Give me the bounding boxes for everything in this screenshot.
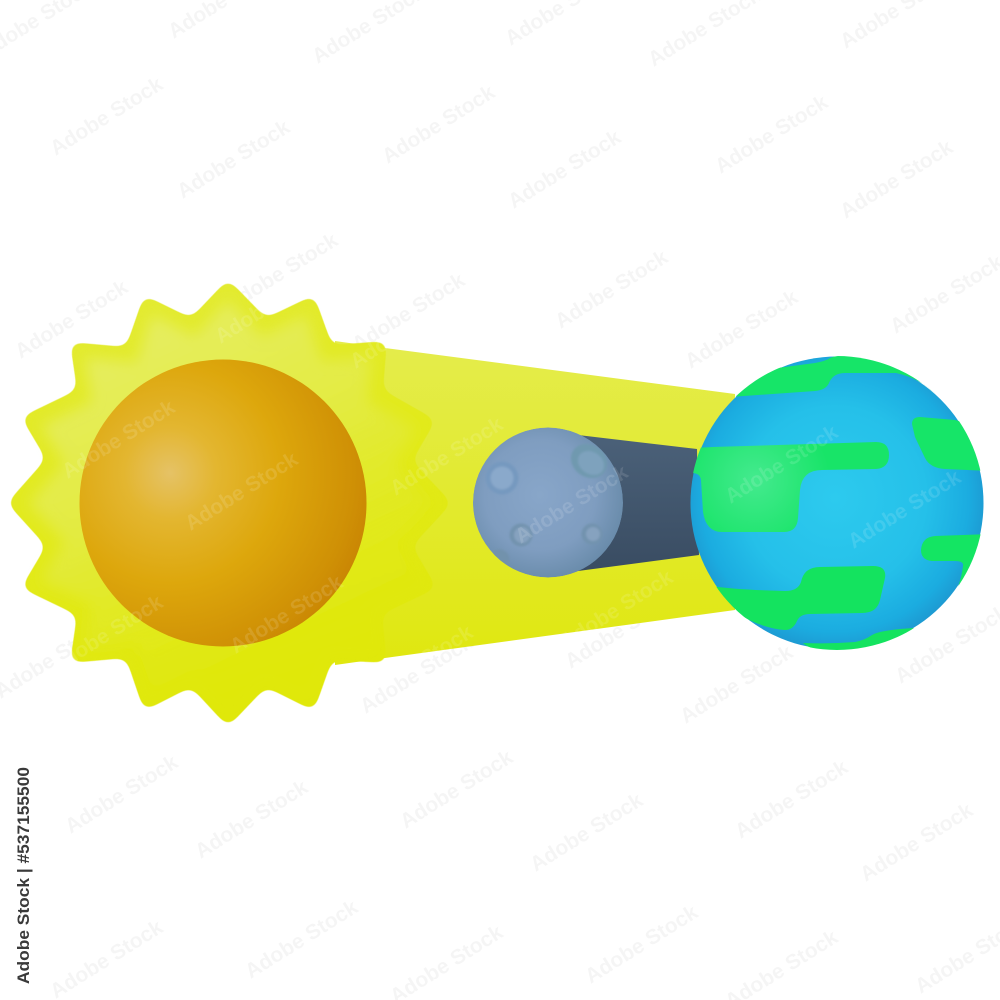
watermark: Adobe Stock repeated on background: Adobe Stock [11, 276, 132, 363]
watermark: Adobe Stock repeated on background: Adobe Stock [504, 126, 625, 213]
watermark: Adobe Stock repeated on background: Adobe Stock [173, 116, 294, 203]
watermark: Adobe Stock repeated on background: Adobe Stock [681, 286, 802, 373]
continent: bottom strip [803, 628, 914, 650]
watermark: Adobe Stock repeated on background: Adobe Stock [396, 746, 517, 833]
watermark: Adobe Stock repeated on background: Adobe Stock [526, 789, 647, 876]
watermark: Adobe Stock over artwork: Adobe Stock [46, 591, 167, 678]
watermark: Adobe Stock over artwork: Adobe Stock [346, 286, 467, 373]
watermark: Adobe Stock repeated on background: Adobe Stock [581, 901, 702, 988]
watermark: Adobe Stock repeated on background: Adobe Stock [61, 751, 182, 838]
watermark: Adobe Stock repeated on background: Adobe Stock [731, 756, 852, 843]
watermark: Adobe Stock repeated on background: Adobe Stock [676, 641, 797, 728]
continent: upper right [912, 417, 980, 471]
watermark: Adobe Stock repeated on background: Adobe Stock [46, 73, 167, 160]
watermark: Adobe Stock repeated on background: Adobe Stock [856, 799, 977, 886]
stock id caption: Adobe Stock | #537155500 [14, 767, 33, 984]
watermark: Adobe Stock over artwork: Adobe Stock [356, 621, 477, 708]
sun [7, 279, 452, 727]
sun rays [7, 279, 452, 727]
continents [692, 356, 990, 650]
watermark: Adobe Stock over artwork [46, 261, 965, 708]
watermark: Adobe Stock over artwork: Adobe Stock [226, 571, 347, 658]
crater: lower left [510, 524, 532, 546]
crater: bottom edge [492, 550, 508, 565]
earth [690, 356, 990, 650]
watermark: Adobe Stock repeated on background: Adobe Stock [356, 631, 477, 718]
continent: middle right [921, 534, 981, 586]
watermark: Adobe Stock over artwork: Adobe Stock [556, 566, 677, 653]
continent: bottom [710, 566, 885, 630]
crater: top right [571, 446, 604, 478]
moon shadow [578, 435, 699, 571]
moon body [473, 428, 623, 578]
watermark: Adobe Stock repeated on background: Adobe Stock [378, 81, 499, 168]
watermark: Adobe Stock repeated on background: Adobe Stock [241, 896, 362, 983]
watermark: Adobe Stock over artwork: Adobe Stock [386, 413, 507, 500]
watermark: Adobe Stock repeated on background: Adobe Stock [551, 246, 672, 333]
moon [473, 428, 623, 578]
watermark: Adobe Stock over artwork: Adobe Stock [181, 448, 302, 535]
crater: left ring [487, 462, 518, 494]
watermark: Adobe Stock repeated on background: Adobe Stock [561, 586, 682, 673]
watermark: Adobe Stock over artwork: Adobe Stock [844, 466, 965, 553]
watermark: Adobe Stock repeated on background: Adobe Stock [221, 229, 342, 316]
sun rays highlight [29, 301, 430, 705]
watermark: Adobe Stock repeated on background: Adobe Stock [348, 269, 469, 356]
watermark: Adobe Stock over artwork: Adobe Stock [511, 461, 632, 548]
watermark: Adobe Stock repeated on background: Adobe Stock [191, 776, 312, 863]
sun disc [80, 360, 366, 646]
watermark: Adobe Stock over artwork: Adobe Stock [211, 261, 332, 348]
watermark: Adobe Stock repeated on background: Adobe Stock [836, 136, 957, 223]
watermark: Adobe Stock over artwork: Adobe Stock [721, 421, 842, 508]
watermark: Adobe Stock repeated on background: Adobe Stock [711, 91, 832, 178]
watermark: Adobe Stock over artwork: Adobe Stock [58, 396, 179, 483]
crater: lower right [582, 524, 600, 542]
continent: center [692, 442, 889, 532]
sunlight beam [335, 341, 735, 665]
continent: top band [730, 356, 937, 397]
ocean [690, 356, 984, 650]
